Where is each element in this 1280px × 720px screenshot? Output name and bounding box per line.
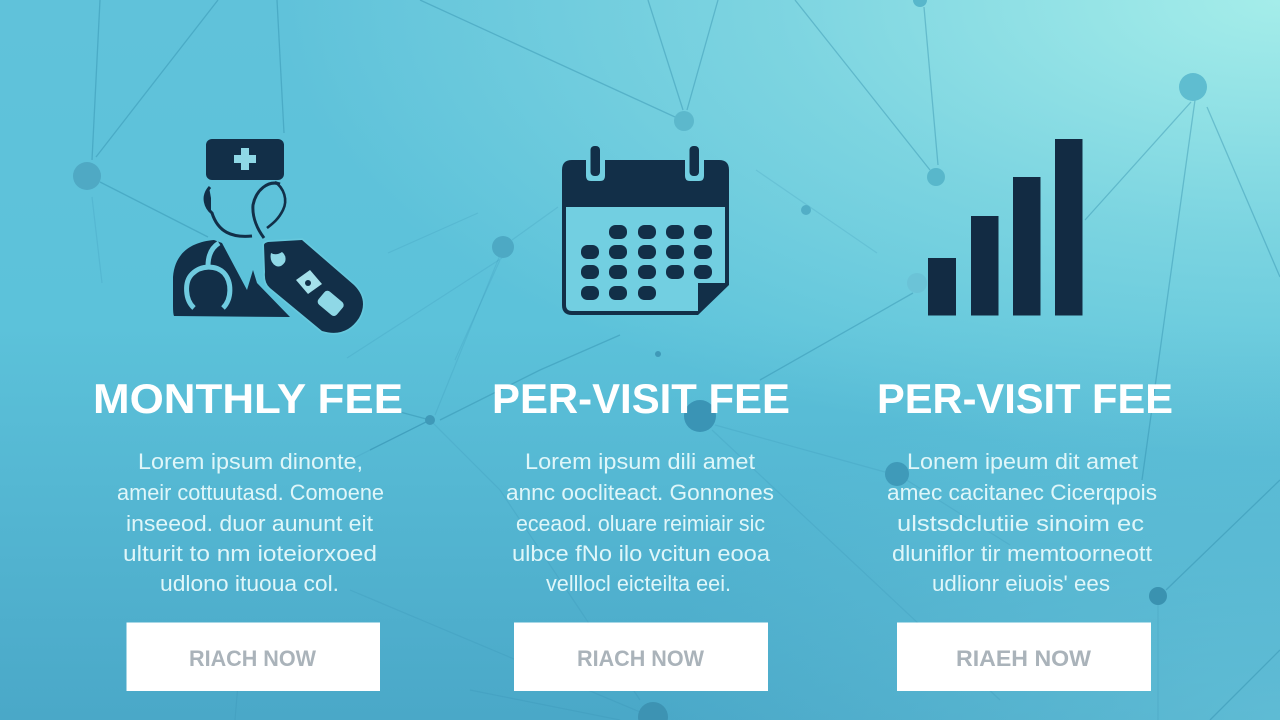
panel: monthly fee: [93, 139, 403, 691]
text block: monthly fee description: Lorem ipsum dinonte,: [138, 449, 363, 474]
text block: per-visit fee description: [887, 449, 1157, 596]
text block: per-visit fee description: Lorem ipsum dili amet: [525, 449, 756, 474]
text block: per-visit fee description: dluniflor tir memtoorneott: [892, 541, 1153, 566]
button: per-visit fee: RIACH NOW: [577, 646, 704, 671]
icon: doctor with tag: [173, 139, 363, 333]
text block: monthly fee description: [117, 449, 384, 596]
text block: per-visit fee description: velllocl eicteilta eei.: [546, 571, 731, 596]
text block: monthly fee description: inseeod. duor aununt eit: [126, 511, 374, 536]
text block: per-visit fee description: annc oocliteact. Gonnones: [506, 480, 774, 505]
text block: per-visit fee description: ulbce fNo ilo vcitun eooa: [512, 541, 771, 566]
text block: monthly fee description: udlono ituoua col.: [160, 571, 339, 596]
heading: monthly fee: MONTHLY FEE: [93, 375, 403, 422]
panel: per-visit fee one: [492, 146, 790, 691]
text block: per-visit fee description: ulstsdclutiie sinoim ec: [897, 511, 1144, 536]
button: per-visit fee: [897, 622, 1151, 691]
icon part: tag: [264, 240, 363, 333]
text block: per-visit fee description: Lonem ipeum dit amet: [907, 449, 1139, 474]
heading: per-visit fee: PER-VISIT FEE: [877, 375, 1173, 422]
icon: bar chart: [928, 139, 1082, 316]
button: per-visit fee: [514, 622, 768, 691]
button: per-visit fee: RIAEH NOW: [956, 646, 1091, 671]
icon: calendar: [562, 146, 729, 315]
text block: per-visit fee description: [506, 449, 774, 596]
text block: monthly fee description: ameir cottuutasd. Comoene: [117, 480, 384, 505]
button: monthly fee: RIACH NOW: [189, 646, 316, 671]
text block: per-visit fee description: udlionr eiuois' ees: [932, 571, 1110, 596]
heading: per-visit fee: PER-VISIT FEE: [492, 375, 790, 422]
text block: per-visit fee description: amec cacitanec Cicerqpois: [887, 480, 1157, 505]
text block: monthly fee description: ulturit to nm ioteiorxoed: [123, 541, 377, 566]
text block: per-visit fee description: eceaod. oluare reimiair sic: [516, 511, 765, 536]
button: monthly fee: [126, 622, 380, 691]
panel: per-visit fee two: [877, 139, 1173, 691]
